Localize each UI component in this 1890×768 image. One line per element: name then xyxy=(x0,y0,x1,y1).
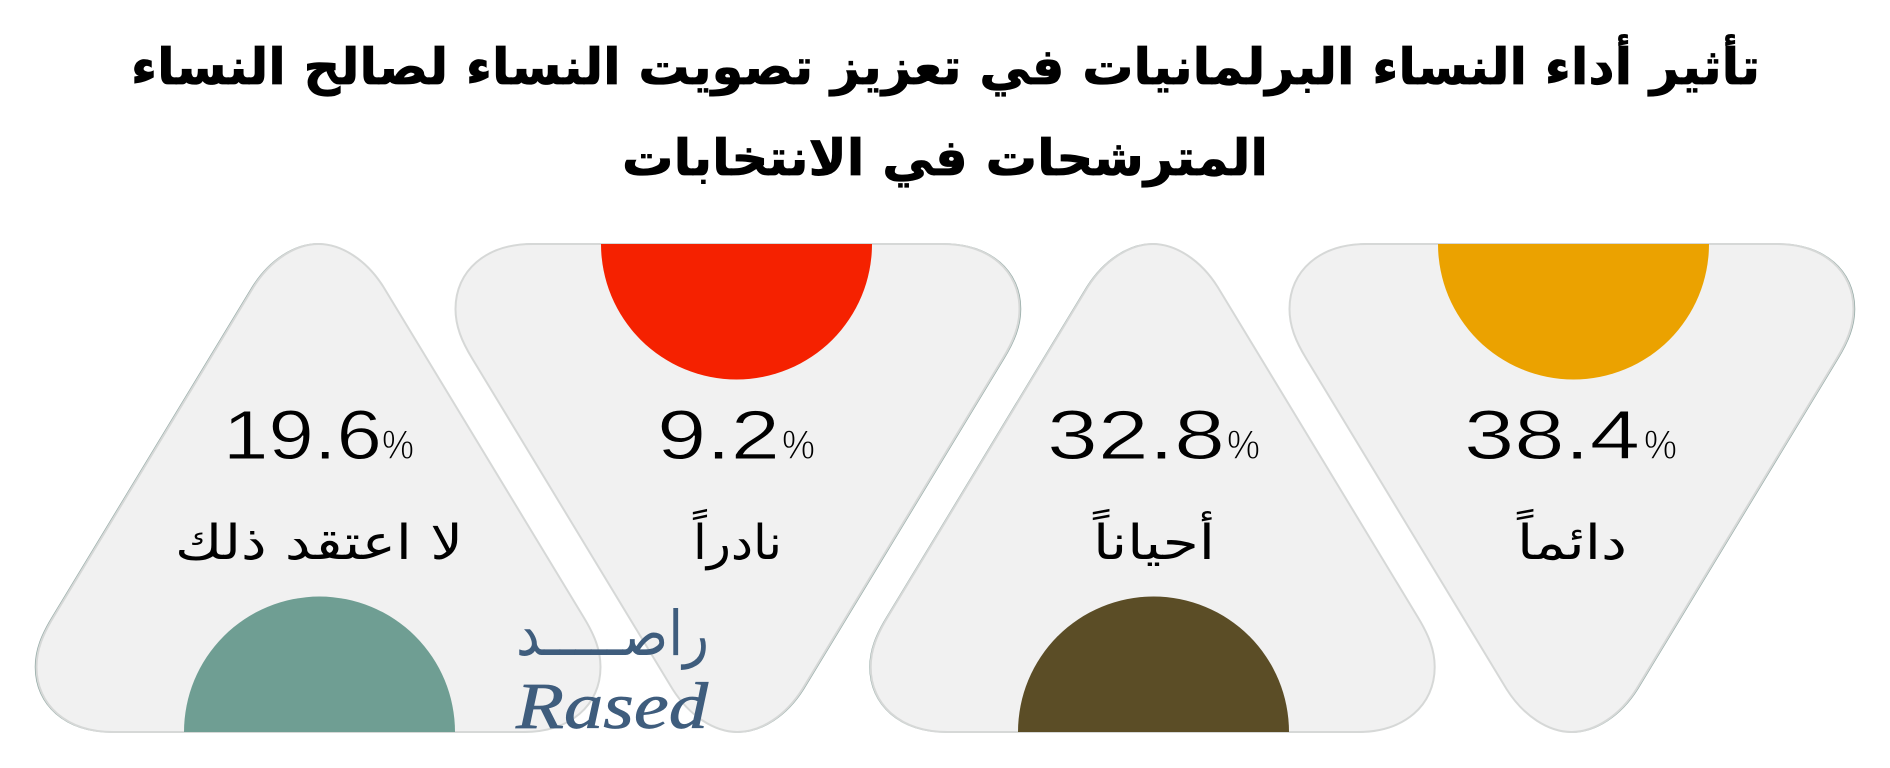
semicircle: red xyxy=(601,244,872,379)
label: لا اعتقد ذلك xyxy=(175,515,463,571)
semicircle: brown xyxy=(1018,596,1289,732)
value: 38.4 xyxy=(1464,396,1640,474)
value: 19.6 xyxy=(223,396,382,474)
title: تأثير أداء النساء البرلمانيات في تعزيز تصويت النساء لصالح النساء xyxy=(131,34,1760,97)
semicircle: green xyxy=(184,597,455,732)
value: 32.8 xyxy=(1047,396,1225,474)
panel: 9.2% rarely xyxy=(456,244,1020,732)
value: % xyxy=(382,422,414,468)
value: % xyxy=(782,422,815,468)
value xyxy=(1047,396,1260,474)
value: % xyxy=(1644,422,1677,468)
label: نادراً xyxy=(693,508,782,571)
title xyxy=(131,34,1760,188)
panel: 19.6% do not think so xyxy=(36,244,600,732)
label: دائماً xyxy=(1517,508,1627,571)
logo: Rased: Rased xyxy=(515,670,709,743)
value xyxy=(657,396,815,474)
semicircle: orange xyxy=(1438,244,1709,379)
value: 9.2 xyxy=(657,396,780,474)
logo: Rased xyxy=(515,597,709,743)
value: % xyxy=(1227,422,1260,468)
value xyxy=(1464,396,1677,474)
panel: 38.4% always xyxy=(1290,244,1854,732)
label: أحياناً xyxy=(1093,508,1215,571)
title: المترشحات في الانتخابات xyxy=(622,129,1268,188)
logo: Rased: راصـــــد xyxy=(516,597,709,670)
panel: 32.8% sometimes xyxy=(870,244,1435,732)
